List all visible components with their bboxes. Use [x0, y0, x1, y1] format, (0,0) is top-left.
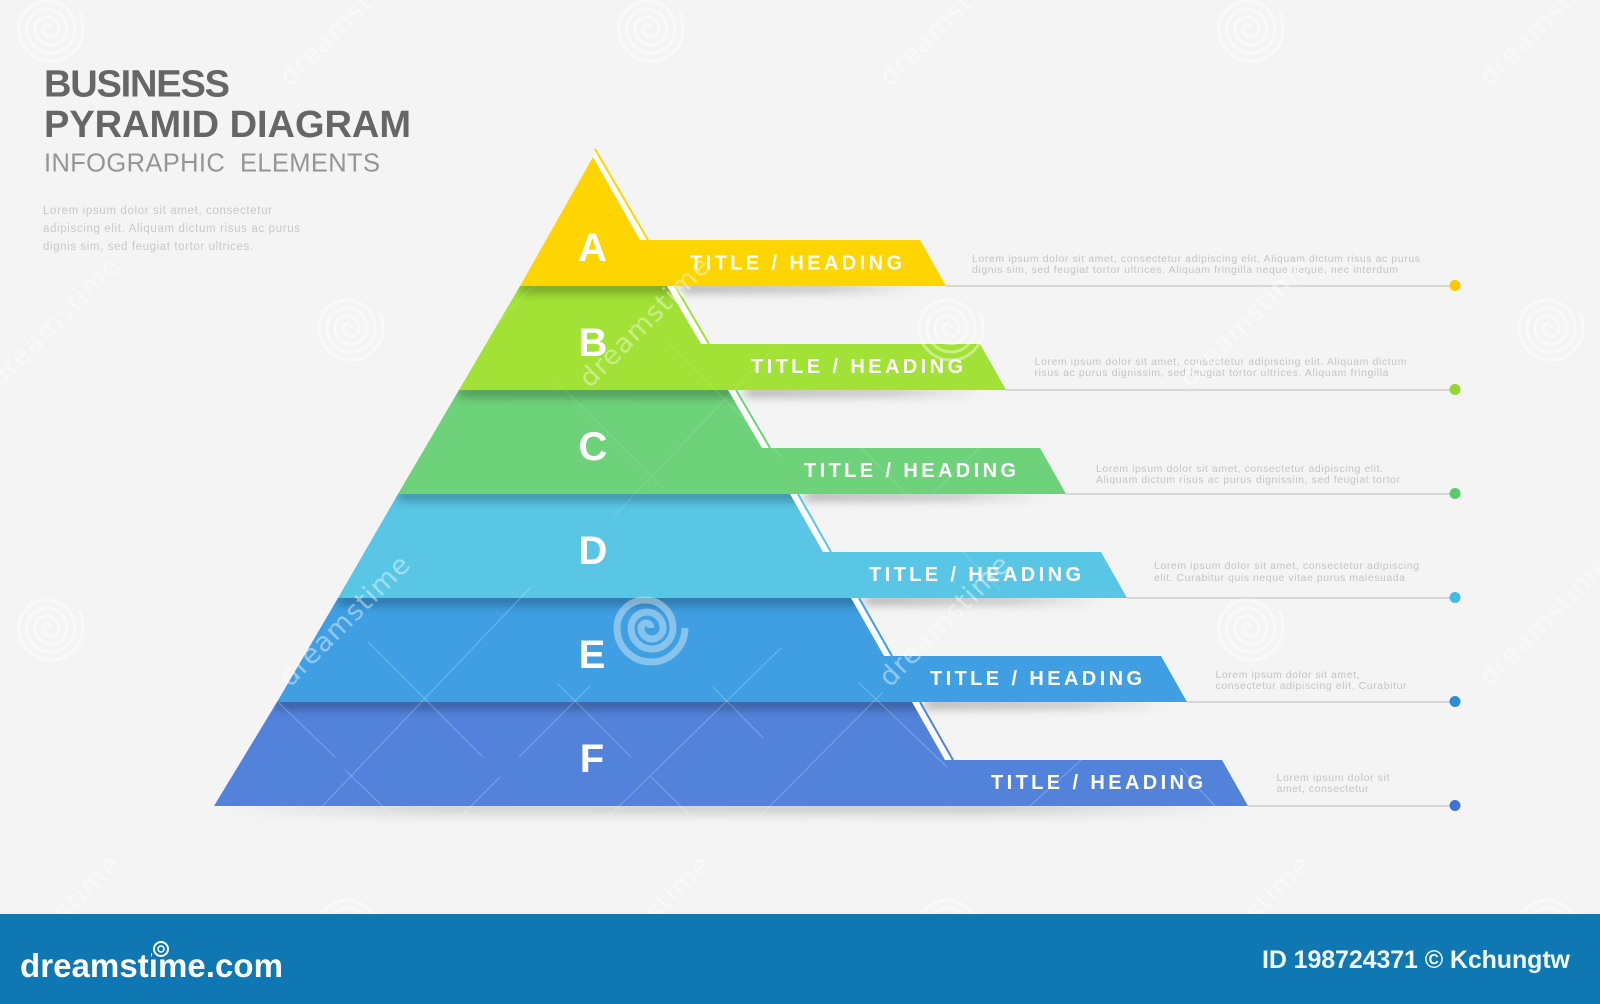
- tab headings: TITLE / HEADING: [804, 460, 1016, 482]
- layer F: [214, 700, 1248, 806]
- description D: elit. Curabitur quis neque vitae purus malesuada: [1154, 572, 1405, 584]
- tab headings: TITLE / HEADING: [930, 668, 1142, 690]
- description B: risus ac purus dignissim, sed feugiat tortor ultrices. Aliquam fringilla: [1034, 367, 1389, 379]
- title: [44, 64, 411, 146]
- layer A: [520, 149, 946, 286]
- intro text block: Lorem ipsum dolor sit amet, consectetur: [43, 205, 272, 217]
- watermark wordmarks: dreamstime: [1173, 849, 1317, 993]
- watermark wordmarks: dreamstime: [273, 549, 417, 693]
- intro text block: [43, 205, 300, 253]
- leader lines and dots: [946, 280, 1460, 811]
- description F: [1276, 772, 1390, 795]
- intro text block: adipiscing elit. Aliquam dictum risus ac purus: [43, 223, 300, 235]
- description A: [972, 253, 1420, 276]
- description F: amet, consectetur: [1276, 783, 1369, 795]
- tab headings: TITLE / HEADING: [690, 252, 902, 274]
- description C: [1096, 463, 1400, 486]
- layer letters: D: [579, 529, 607, 573]
- layer letters: E: [579, 633, 605, 677]
- layer letters: C: [579, 425, 607, 469]
- description E: consectetur adipiscing elit. Curabitur: [1216, 680, 1407, 692]
- description D: [1154, 560, 1419, 584]
- layer B: [459, 284, 1006, 390]
- layer E: [277, 596, 1187, 702]
- footer bar: [0, 914, 1600, 1004]
- description F: Lorem ipsum dolor sit: [1276, 772, 1390, 784]
- watermark wordmarks: dreamstime: [573, 250, 717, 394]
- watermark wordmarks: dreamstime: [873, 549, 1017, 693]
- description A: Lorem ipsum dolor sit amet, consectetur adipiscing elit. Aliquam dictum risus ac purus: [972, 253, 1420, 265]
- title: BUSINESS: [44, 64, 230, 106]
- tab headings: TITLE / HEADING: [751, 356, 963, 378]
- description C: Lorem ipsum dolor sit amet, consectetur adipiscing elit.: [1096, 463, 1383, 475]
- description C: Aliquam dictum risus ac purus dignissim, sed feugiat tortor: [1096, 474, 1400, 486]
- watermark wordmarks: dreamstime: [1173, 250, 1317, 394]
- description D: Lorem ipsum dolor sit amet, consectetur adipiscing: [1154, 560, 1419, 572]
- watermark spiral on layer E: [617, 600, 685, 662]
- pyramid: [214, 149, 1248, 812]
- description B: Lorem ipsum dolor sit amet, consectetur adipiscing elit. Aliquam dictum: [1034, 356, 1407, 368]
- description E: Lorem ipsum dolor sit amet,: [1216, 669, 1360, 681]
- layer letters: B: [579, 321, 607, 365]
- layer letters: [578, 226, 607, 781]
- layer letters: F: [580, 737, 604, 781]
- layer D: [338, 492, 1127, 598]
- layer letters: A: [578, 226, 607, 270]
- title: PYRAMID DIAGRAM: [44, 104, 411, 146]
- image id and credit: ID 198724371 © Kchungtw: [1262, 946, 1571, 974]
- tab headings: TITLE / HEADING: [869, 564, 1081, 586]
- tab headings: TITLE / HEADING: [991, 772, 1203, 794]
- tab headings: [690, 252, 1203, 794]
- watermark wordmarks: dreamstime: [573, 849, 717, 993]
- description A: dignis sim, sed feugiat tortor ultrices. Aliquam fringilla neque neque, nec interdum: [972, 264, 1398, 276]
- layer C: [398, 388, 1066, 494]
- footer logo: dreamstime.com: [20, 947, 283, 984]
- description E: [1216, 669, 1407, 692]
- upper watermark pattern lines: [500, 202, 1000, 590]
- description B: [1034, 356, 1407, 379]
- watermark pattern lines: [279, 587, 1215, 817]
- intro text block: dignis sim, sed feugiat tortor ultrices.: [43, 241, 253, 253]
- subtitle: INFOGRAPHIC ELEMENTS: [44, 150, 380, 178]
